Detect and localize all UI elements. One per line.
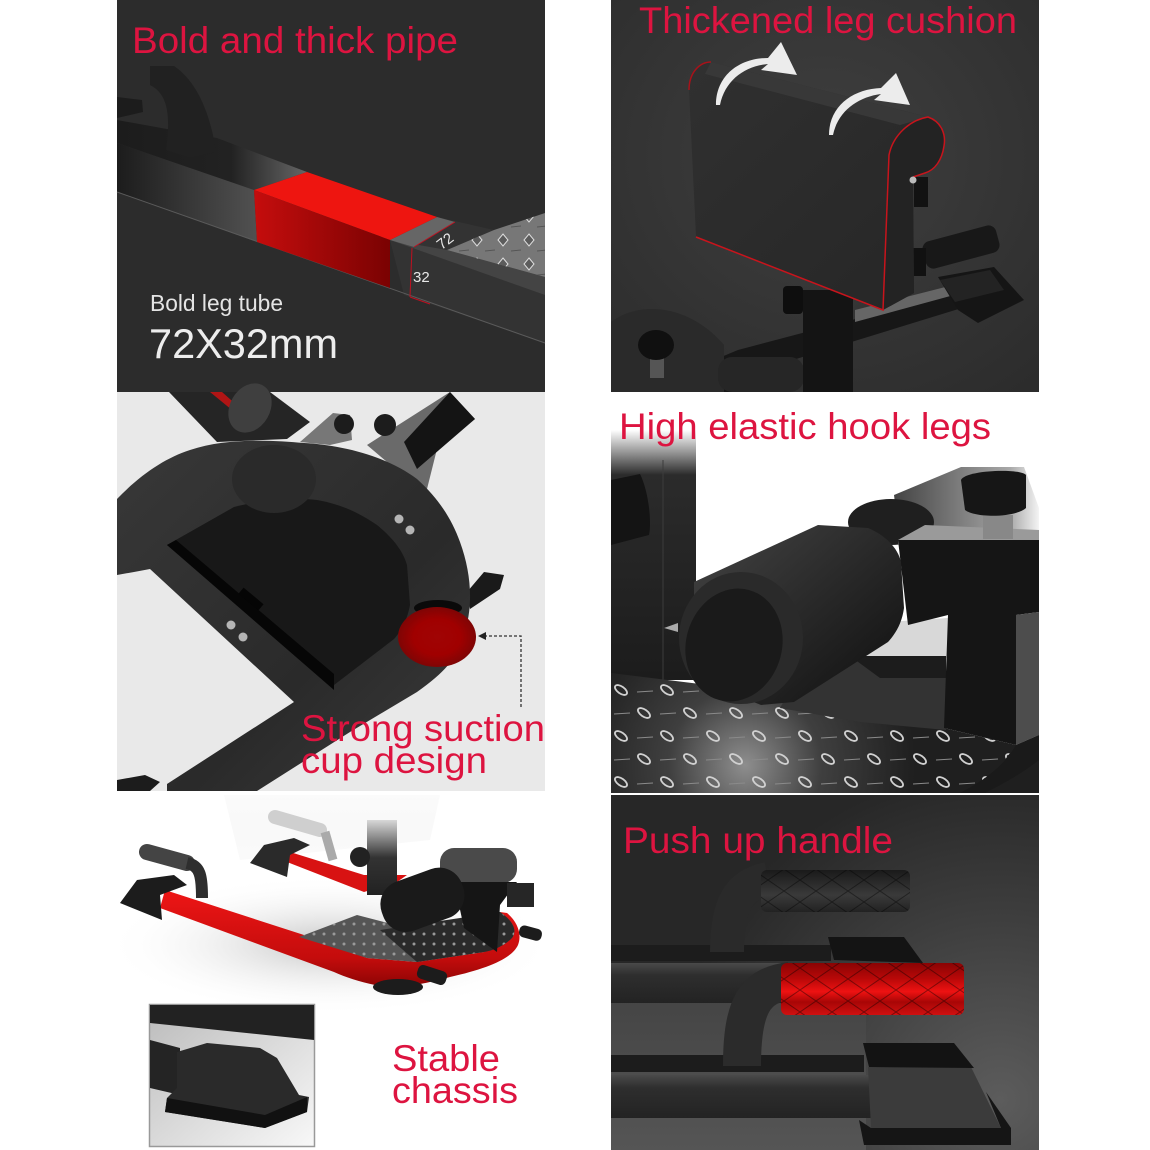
icon: frame and rollers — [611, 267, 1024, 392]
icon: lower foot — [117, 775, 160, 791]
heading: thickened leg cushion: Thickened leg cushion — [639, 0, 1017, 41]
panel: stable chassis — [105, 795, 555, 1150]
icon: back handle — [275, 817, 333, 860]
heading: push up handle: Push up handle — [623, 820, 893, 861]
icon: front handle — [742, 963, 964, 1066]
icon: knob right — [961, 471, 1026, 539]
icon: handle — [147, 852, 202, 898]
icon: faded backdrop — [224, 795, 440, 860]
inset: rubber foot — [150, 1004, 314, 1146]
icon: back foot — [250, 838, 310, 877]
panel: push up handle — [611, 795, 1039, 1150]
icon: frame block — [780, 525, 1039, 745]
dimension: 72: 72 — [434, 230, 457, 253]
panel: bold and thick pipe — [117, 0, 545, 392]
caption: tube dimensions: 72X32mm — [149, 320, 338, 367]
heading: strong suction cup design: cup design — [301, 740, 487, 781]
icon: arched upright tube — [117, 66, 216, 158]
icon: knob left — [611, 474, 650, 545]
icon: back red rail — [287, 852, 407, 892]
caption: bold leg tube: Bold leg tube — [150, 290, 283, 316]
icon: back roller — [848, 499, 934, 545]
icon: red pipe section — [254, 172, 437, 288]
pipe: black leg tube — [117, 120, 545, 343]
heading: stable chassis: chassis — [392, 1070, 518, 1111]
dimension: 32: 32 — [413, 269, 430, 286]
panel: strong suction cup — [117, 375, 545, 791]
icon: U frame — [117, 441, 470, 791]
panel: high elastic hook legs — [611, 395, 1039, 793]
icon: front rail — [611, 1055, 871, 1118]
icon: rear foot — [828, 937, 923, 963]
icon: foam roller — [664, 525, 904, 712]
heading: strong suction cup design: Strong suction — [301, 708, 545, 749]
dimension lines — [410, 222, 455, 304]
icon: cup recess — [414, 600, 462, 616]
icon: rotate arrow left — [716, 42, 797, 105]
icon: inner plate — [167, 499, 410, 690]
icon: bolt tab — [914, 177, 928, 207]
panel: thickened leg cushion — [611, 0, 1039, 392]
icon: lower floor — [611, 1000, 866, 1150]
icon: back wedge — [894, 467, 1039, 545]
icon: upright post — [611, 430, 696, 680]
icon: rear handle — [727, 870, 910, 952]
icon: front foot — [859, 1043, 1011, 1145]
icon: feet — [120, 875, 543, 995]
icon: leg cushion — [689, 62, 944, 310]
icon: suction cup top — [232, 445, 316, 513]
icon: floor shadow — [105, 875, 555, 1015]
heading: bold and thick pipe: Bold and thick pipe — [132, 20, 458, 61]
icon: chequer plate pattern — [447, 213, 545, 277]
icon: floor plate — [611, 673, 1039, 793]
icon: top bars — [169, 375, 504, 609]
icon: chequer plate — [447, 213, 545, 277]
icon: rotate arrow right — [829, 73, 910, 135]
arrow head — [478, 632, 486, 640]
heading: stable chassis: Stable — [392, 1038, 500, 1079]
icon: red U base — [160, 890, 520, 987]
icon: red suction cup — [398, 607, 476, 667]
heading: high elastic hook legs: High elastic hook legs — [619, 406, 991, 447]
icon: rear rail — [611, 945, 831, 1003]
icon: base plate — [299, 912, 514, 962]
icon: post and roller — [350, 820, 534, 952]
icon: screws — [226, 514, 414, 642]
icon: handle grip — [912, 224, 1001, 276]
arrow: dotted leader — [484, 636, 521, 707]
